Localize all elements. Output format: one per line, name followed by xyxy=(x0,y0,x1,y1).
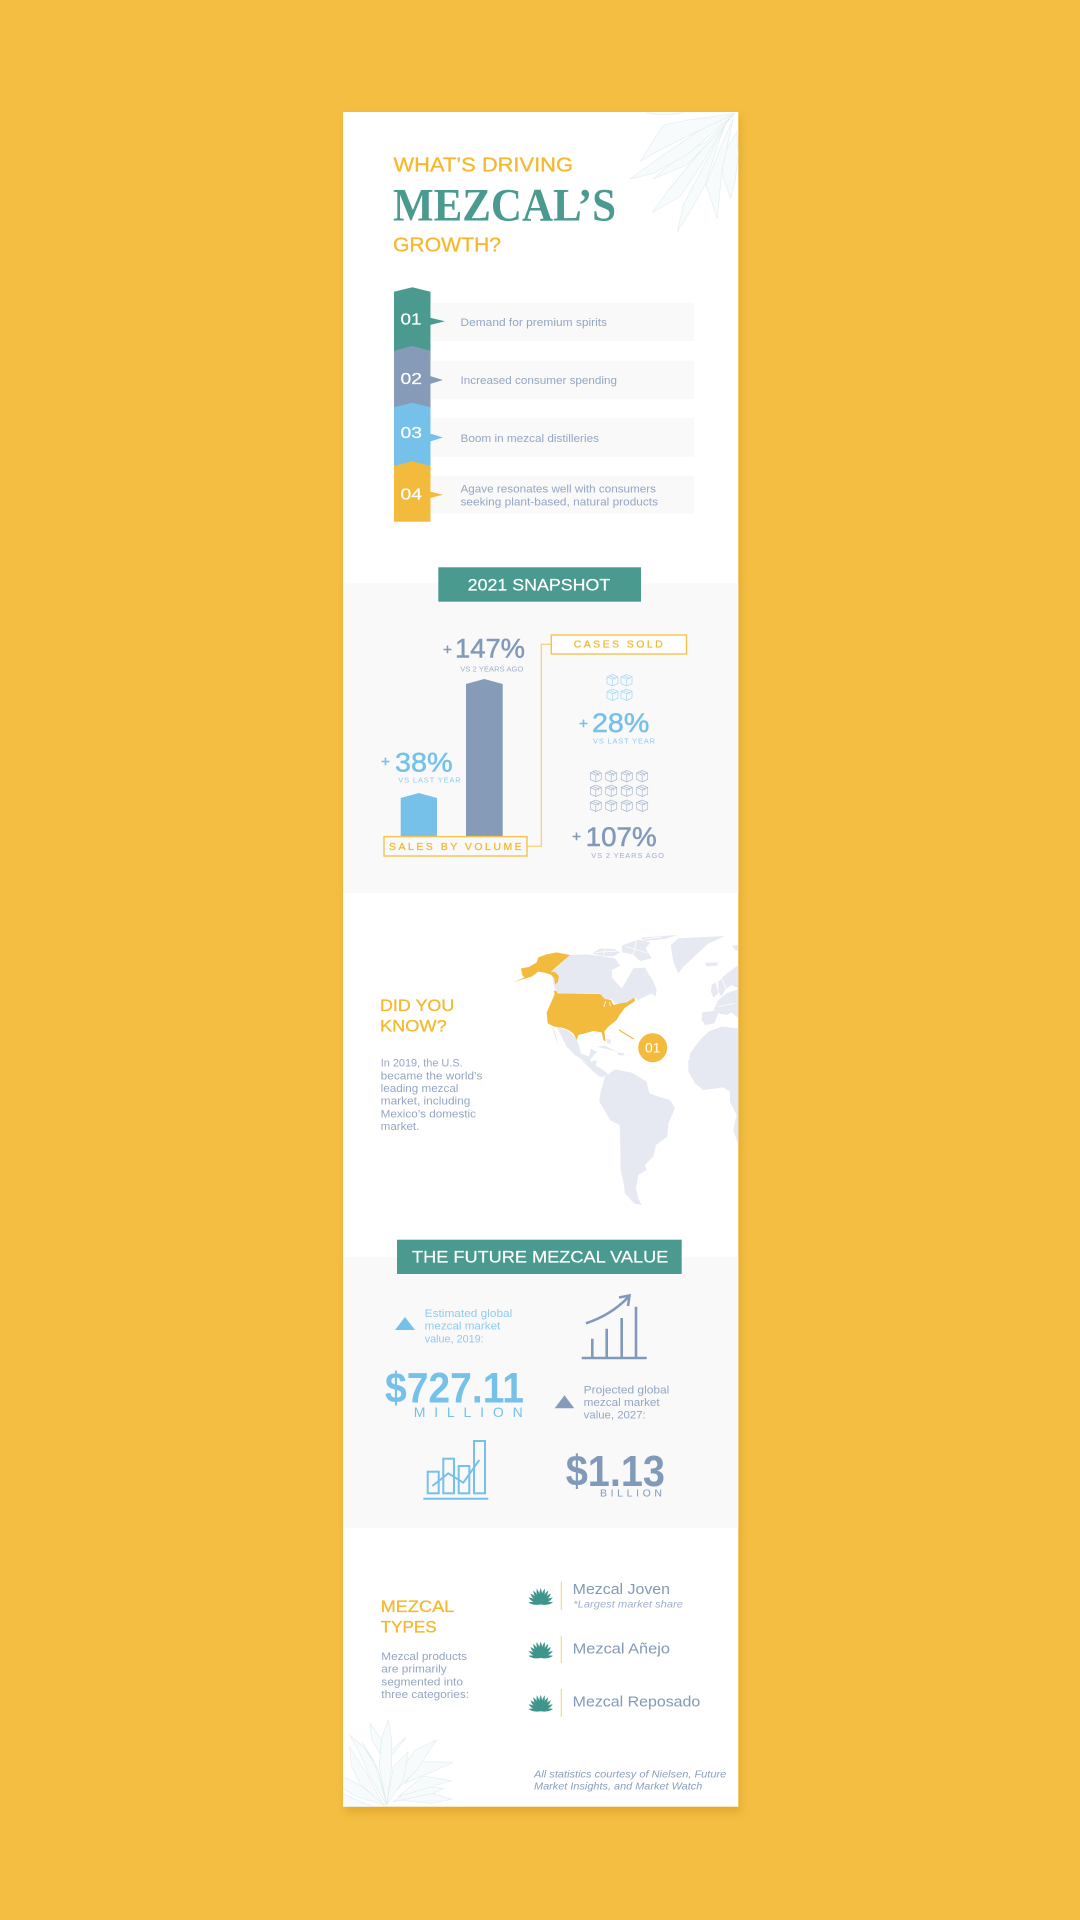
stat: +28% xyxy=(579,708,656,746)
value: 727.11 million: MILLION xyxy=(414,1404,523,1420)
text: source credit: Market Insights, and Market Watch xyxy=(534,1781,702,1793)
icons: 12 grey cases xyxy=(590,770,648,812)
text: did you know body: Mexico’s domestic xyxy=(381,1108,477,1120)
driver labels: Boom in mezcal distilleries xyxy=(460,433,600,445)
label: projected value: value, 2027: xyxy=(584,1409,646,1421)
icon: outlined bars with line xyxy=(423,1441,488,1499)
banner: 2021 snapshot: 2021 SNAPSHOT xyxy=(468,576,610,595)
text: did you know body: market. xyxy=(381,1121,419,1133)
segment 03 xyxy=(394,403,443,468)
panel: 2021 snapshot xyxy=(343,567,738,893)
icons: 4 blue cases xyxy=(607,674,632,700)
item: mezcal reposado: Mezcal Reposado xyxy=(573,1695,700,1711)
item: mezcal anejo: Mezcal Añejo xyxy=(573,1642,670,1658)
stat: +107% xyxy=(572,822,664,860)
stat: +28%: 28% xyxy=(592,708,649,738)
banner: 2021 snapshot xyxy=(438,567,641,602)
value: 727.11 million: $727.11 xyxy=(385,1365,524,1413)
driver labels: seeking plant-based, natural products xyxy=(460,496,659,508)
text: mezcal types body: segmented into xyxy=(381,1676,463,1688)
text: mezcal types body xyxy=(381,1651,469,1701)
text: source credit xyxy=(533,1769,726,1793)
stat: +147%: 147% xyxy=(455,634,525,664)
heading: mezcal types: TYPES xyxy=(381,1617,437,1636)
snapshot background xyxy=(343,583,738,893)
numbers: 03 xyxy=(400,425,422,442)
map: united states highlighted xyxy=(512,952,635,1042)
label: estimated value: value, 2019: xyxy=(425,1333,484,1345)
driver labels: Demand for premium spirits xyxy=(460,317,608,329)
stat: +147%: VS 2 YEARS AGO xyxy=(460,664,523,673)
stat: +38%: + xyxy=(381,754,390,770)
title line 2: MEZCAL’S xyxy=(393,181,616,232)
heading: did you know: DID YOU xyxy=(380,996,454,1015)
stat: +38%: VS LAST YEAR xyxy=(398,775,461,784)
icon: grey triangle xyxy=(555,1395,574,1408)
stat: +107%: VS 2 YEARS AGO xyxy=(591,851,664,860)
item: mezcal joven: Mezcal Joven xyxy=(573,1582,670,1598)
stat: 2019 value xyxy=(385,1308,524,1420)
numbers: 01 xyxy=(400,312,422,329)
connector between labels xyxy=(527,644,551,846)
value: 1.13 billion: BILLION xyxy=(600,1487,662,1499)
heading: mezcal types xyxy=(381,1597,454,1636)
title xyxy=(393,155,616,257)
numbers: 02 xyxy=(400,371,422,388)
item: mezcal joven xyxy=(528,1582,683,1611)
text: source credit: All statistics courtesy of Nielsen, Future xyxy=(533,1769,726,1781)
value: 1.13 billion: $1.13 xyxy=(566,1447,665,1496)
future background xyxy=(343,1257,738,1528)
label: estimated value xyxy=(425,1308,512,1345)
label: estimated value: Estimated global xyxy=(425,1308,512,1320)
stat: +38% xyxy=(381,748,461,784)
white card xyxy=(343,112,738,1807)
label: cases sold: CASES SOLD xyxy=(574,638,663,650)
driver labels: Agave resonates well with consumers xyxy=(460,484,657,496)
row backgrounds xyxy=(431,303,694,514)
stat: +107%: + xyxy=(572,829,581,846)
item: mezcal reposado xyxy=(528,1689,700,1717)
text: did you know body: In 2019, the U.S. xyxy=(381,1058,463,1070)
text: mezcal types body: Mezcal products xyxy=(381,1651,468,1663)
callout: 01: 01 xyxy=(645,1040,660,1056)
stat: +107%: 107% xyxy=(586,822,657,852)
title line 3: GROWTH? xyxy=(393,235,501,257)
world map xyxy=(512,935,742,1205)
heading: did you know: KNOW? xyxy=(380,1017,447,1036)
card shadow xyxy=(345,116,741,1813)
label: sales by volume xyxy=(384,837,527,856)
banner: the future mezcal value xyxy=(397,1240,682,1274)
segment 01 xyxy=(394,287,445,352)
stat: +28%: VS LAST YEAR xyxy=(593,737,656,746)
item: mezcal joven: *Largest market share xyxy=(573,1600,683,1611)
label: projected value xyxy=(584,1384,669,1421)
callout: 01 xyxy=(619,1030,667,1062)
panel: the future mezcal value xyxy=(343,1240,738,1528)
segment 04 xyxy=(394,461,443,522)
label: cases sold xyxy=(551,635,686,654)
heading: did you know xyxy=(380,996,454,1036)
map: south america xyxy=(580,1060,742,1205)
icon: blue triangle xyxy=(395,1317,415,1330)
stat: +38%: 38% xyxy=(395,748,453,778)
label: projected value: Projected global xyxy=(584,1384,669,1396)
heading: mezcal types: MEZCAL xyxy=(381,1597,454,1616)
banner: the future mezcal value: THE FUTURE MEZCAL VALUE xyxy=(412,1248,668,1267)
decorative agave: top right xyxy=(630,112,738,232)
title line 1: WHAT’S DRIVING xyxy=(394,155,573,177)
numbers: 04 xyxy=(400,487,422,504)
stat: 2027 value xyxy=(555,1384,669,1499)
driver labels: Increased consumer spending xyxy=(460,375,617,387)
stat: +28%: + xyxy=(579,716,588,732)
driver labels xyxy=(460,317,659,508)
label: projected value: mezcal market xyxy=(584,1397,660,1409)
numbers xyxy=(400,312,422,504)
stat: +147% xyxy=(443,634,525,673)
label: estimated value: mezcal market xyxy=(425,1321,500,1333)
segment 02 xyxy=(394,346,443,410)
text: mezcal types body: are primarily xyxy=(381,1664,447,1676)
label: sales by volume: SALES BY VOLUME xyxy=(389,841,522,853)
panel: growth drivers list xyxy=(394,287,694,522)
text: did you know body: leading mezcal xyxy=(381,1083,458,1095)
stat: +147%: + xyxy=(443,642,452,658)
text: mezcal types body: three categories: xyxy=(381,1689,469,1701)
item: mezcal anejo xyxy=(528,1636,670,1663)
decorative agave: bottom left xyxy=(343,1720,453,1807)
map: grey land north and central xyxy=(551,935,738,1077)
text: did you know body: market, including xyxy=(381,1096,470,1108)
text: did you know body xyxy=(381,1058,483,1133)
bar chart: sales by volume xyxy=(401,679,503,837)
panel: did you know xyxy=(380,935,742,1205)
text: did you know body: became the world’s xyxy=(381,1070,483,1082)
icon: rising bar chart with arrow xyxy=(582,1296,647,1358)
panel: mezcal types xyxy=(343,1582,726,1807)
